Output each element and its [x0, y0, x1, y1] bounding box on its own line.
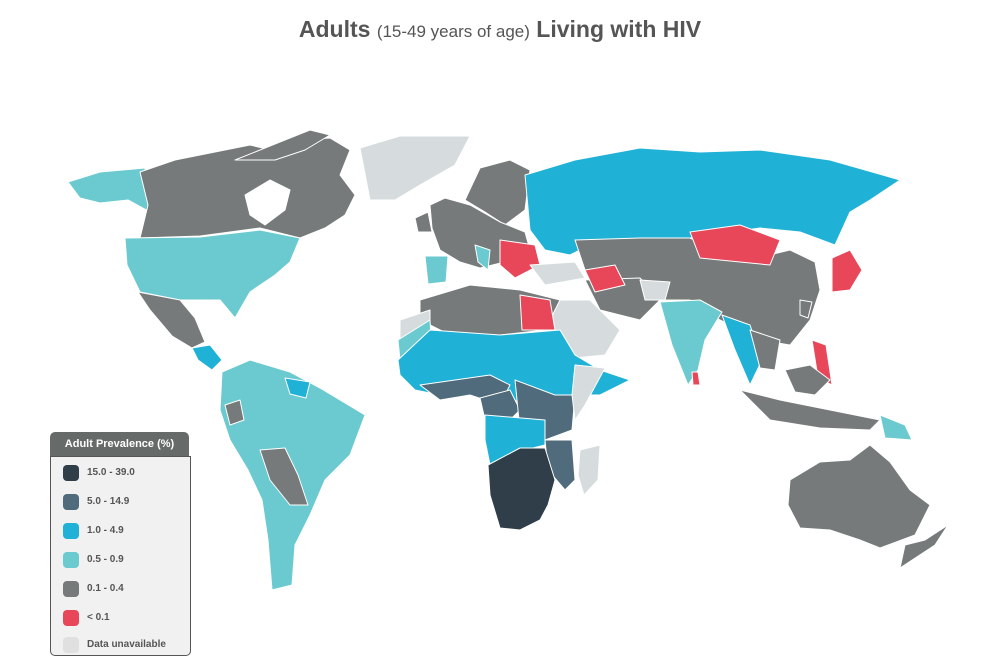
legend items: 1.0 - 4.9 [87, 525, 124, 536]
legend items: < 0.1 [87, 612, 110, 623]
legend items: Data unavailable [87, 639, 166, 650]
legend items: 0.5 - 0.9 [87, 554, 124, 565]
south america [220, 360, 365, 590]
europe [415, 160, 585, 285]
title: Adults (15-49 years of age) Living with HIV [299, 16, 701, 42]
legend items: 15.0 - 39.0 [87, 467, 135, 478]
russia [525, 148, 900, 255]
north america [68, 130, 470, 370]
oceania [788, 445, 948, 568]
africa [398, 285, 630, 530]
legend items: 5.0 - 14.9 [87, 496, 129, 507]
legend items: 0.1 - 0.4 [87, 583, 124, 594]
asia [540, 225, 912, 440]
legend [50, 432, 191, 656]
legend items [50, 456, 191, 656]
legend header: Adult Prevalence (%) [65, 438, 174, 450]
legend header [50, 432, 189, 456]
